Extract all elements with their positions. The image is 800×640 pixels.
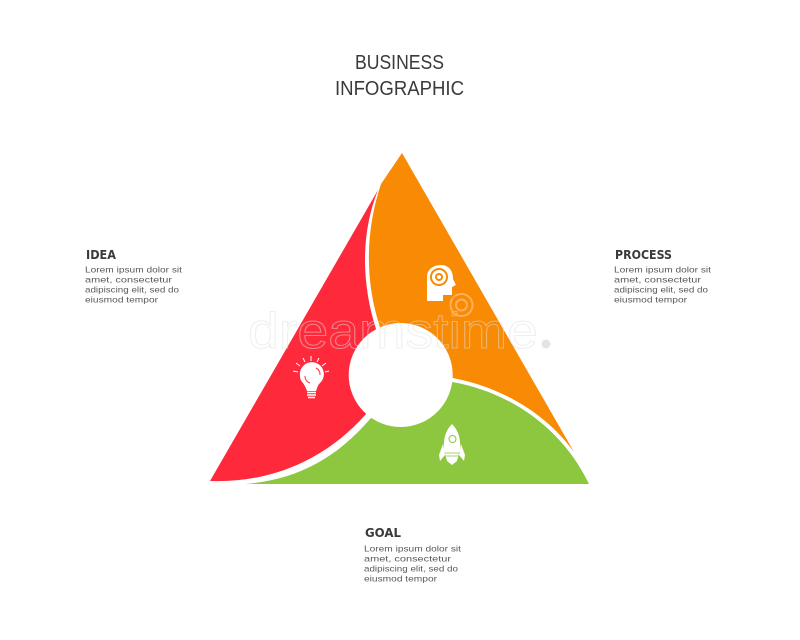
triangle diagram (210, 153, 589, 484)
label: idea: adipiscing elit, sed do (85, 284, 179, 294)
segment: green goal (245, 375, 589, 484)
label: idea: Lorem ipsum dolor sit (85, 264, 183, 274)
label: goal: GOAL (365, 526, 401, 540)
title: INFOGRAPHIC (335, 78, 464, 100)
label: process: eiusmod tempor (614, 294, 687, 304)
icon: rocket (439, 424, 465, 465)
label: goal: Lorem ipsum dolor sit (364, 544, 462, 554)
label: process: adipiscing elit, sed do (614, 284, 708, 294)
icon: head with gear (427, 265, 456, 301)
label: idea (85, 248, 183, 304)
label: idea: IDEA (86, 248, 117, 262)
label: idea: amet, consectetur (85, 274, 172, 284)
segment: red idea (210, 190, 400, 481)
title (335, 52, 464, 100)
label: goal: amet, consectetur (364, 554, 451, 564)
label: idea: eiusmod tempor (85, 294, 158, 304)
watermark: dreamstime (248, 303, 538, 359)
label: goal (364, 526, 462, 584)
center circle (349, 323, 453, 427)
label: process: PROCESS (615, 248, 672, 262)
label: process: Lorem ipsum dolor sit (614, 264, 712, 274)
label: goal: adipiscing elit, sed do (364, 564, 458, 574)
label: process (614, 248, 712, 304)
label: process: amet, consectetur (614, 274, 701, 284)
icon: light bulb (293, 356, 329, 398)
label: goal: eiusmod tempor (364, 574, 437, 584)
segment: orange process (369, 153, 574, 452)
title: BUSINESS (355, 52, 444, 74)
